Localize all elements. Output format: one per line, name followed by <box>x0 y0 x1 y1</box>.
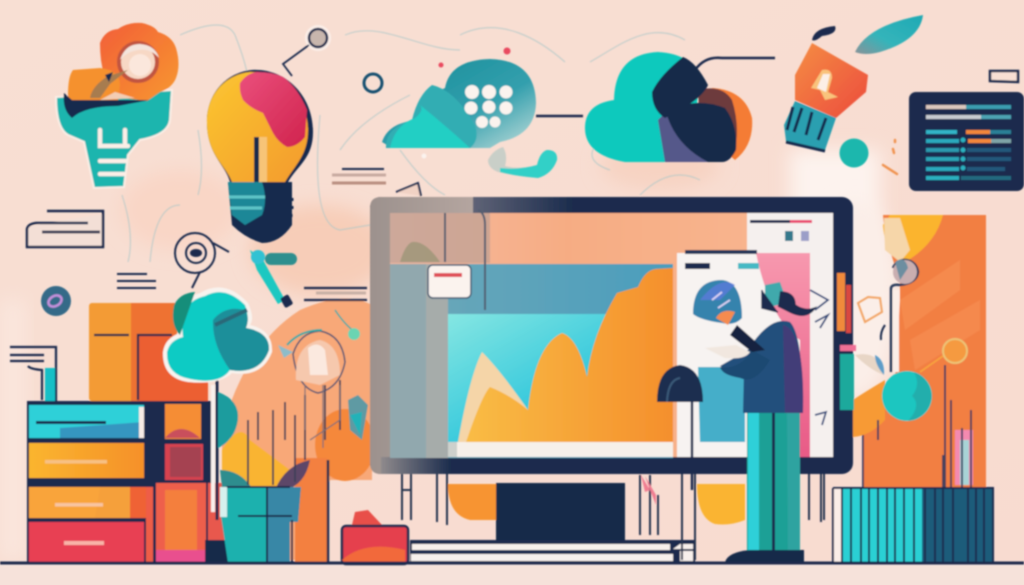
text lines centre left <box>304 288 367 300</box>
right white sheet <box>677 220 856 457</box>
monitor legs and flags <box>402 474 824 560</box>
drawer right column <box>156 404 206 562</box>
orange sparks <box>883 140 897 174</box>
tree cloud <box>163 287 272 520</box>
left text note <box>10 347 56 402</box>
teal arrow handle <box>250 250 297 308</box>
teal small circle <box>840 138 868 168</box>
orange back boxes <box>89 303 208 401</box>
person at screen <box>693 280 815 563</box>
side teal crystal <box>348 395 368 440</box>
filing cabinet <box>27 401 230 563</box>
torch tube icon <box>784 26 868 151</box>
cloud teal and navy <box>585 52 775 162</box>
text lines top centre <box>332 169 386 183</box>
hanging tag <box>428 265 471 298</box>
teal leaf <box>855 15 923 54</box>
monitor stand and base <box>410 483 695 563</box>
monitor <box>370 197 856 474</box>
area chart <box>448 268 673 457</box>
icon: ring pin with stem <box>283 25 331 76</box>
drawer red <box>29 522 144 562</box>
desk lamp <box>657 365 703 490</box>
icon: target rings <box>175 233 229 288</box>
right orange panel <box>853 215 986 487</box>
monitor screen <box>390 210 833 458</box>
dashboard panel <box>909 71 1024 191</box>
icon: ring <box>364 74 382 92</box>
barcode panel <box>832 488 993 563</box>
note card left <box>27 211 103 247</box>
icon: small triangle flag <box>396 183 421 196</box>
red case on floor <box>342 510 408 564</box>
teal swoosh <box>422 147 557 178</box>
text lines left <box>117 274 156 288</box>
cloud with dot grid <box>382 59 583 148</box>
drawer yellow <box>29 443 144 478</box>
floor line <box>0 562 1024 564</box>
plant in pot <box>220 380 340 563</box>
gauge ring and bars <box>278 310 360 448</box>
icon: funnel with flower and pencil <box>56 23 178 188</box>
monitor frame <box>370 197 853 474</box>
background orange blob <box>222 299 745 562</box>
thin connector lines <box>122 25 700 262</box>
icon: red dots <box>438 48 510 68</box>
icon: light bulb <box>207 70 313 243</box>
left purple badge <box>41 286 71 316</box>
drawer orange <box>29 487 153 518</box>
drawer teal <box>29 405 144 438</box>
